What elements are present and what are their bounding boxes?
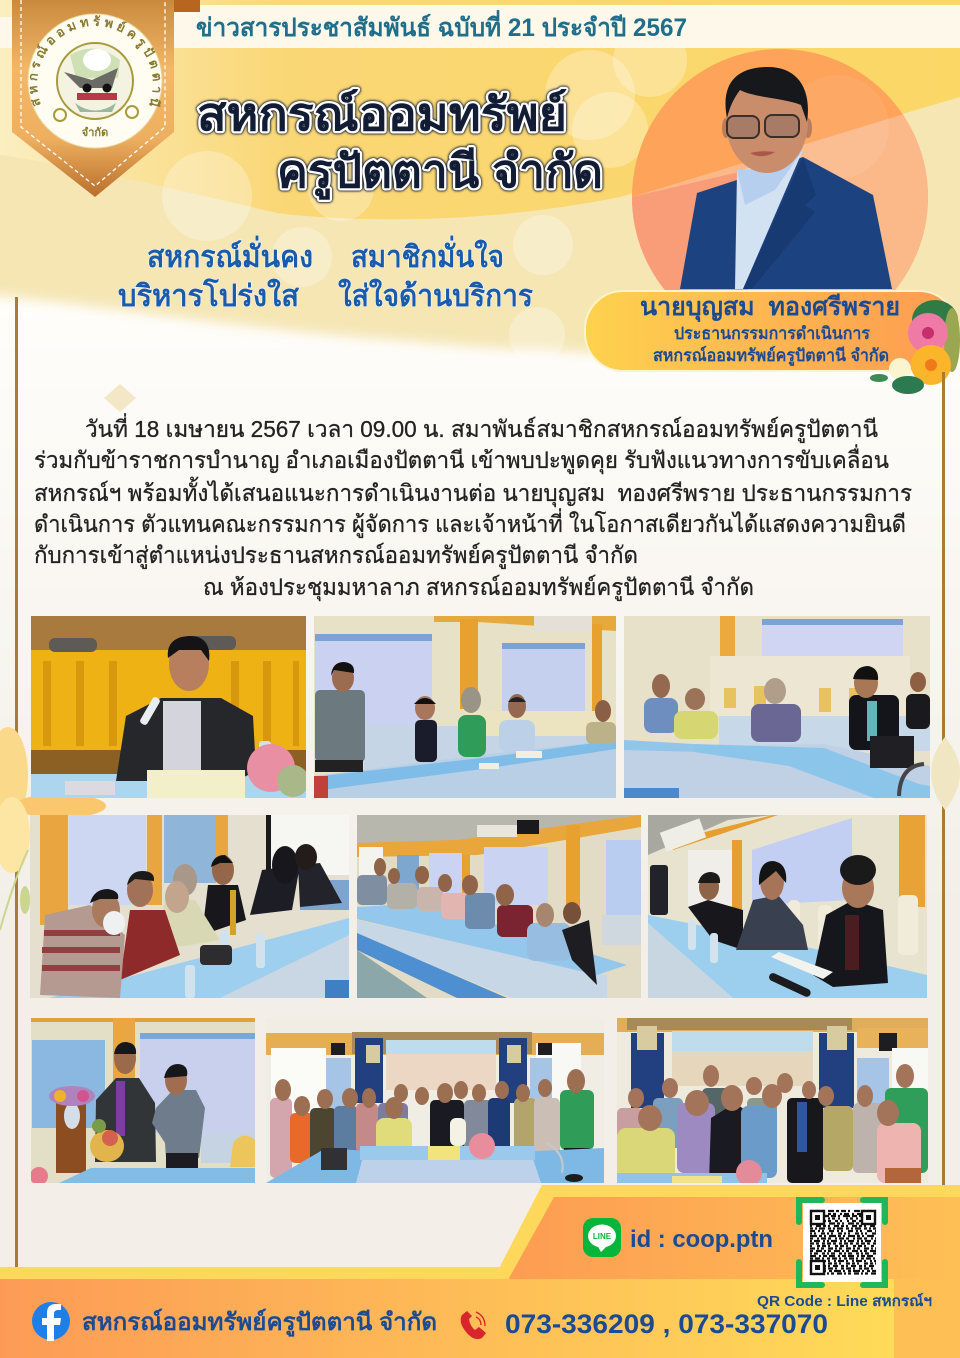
- side rules: [15, 297, 945, 1267]
- header band: [0, 5, 960, 48]
- icon: LINE: [583, 1218, 621, 1257]
- photo 5: long table view: [357, 815, 641, 998]
- photo 7: speakers at podium: [31, 1018, 255, 1183]
- photo 4: attendees side view: [30, 815, 349, 998]
- body text: ณ ห้องประชุมมหาลาภ สหกรณ์ออมทรัพย์ครูปัตตานี จำกัด: [203, 574, 754, 601]
- chairman name: นายบุญสม ทองศรีพราย: [640, 293, 900, 323]
- icon: LINE: LINE: [593, 1232, 612, 1241]
- main title: [197, 88, 603, 200]
- name plate: [585, 291, 957, 371]
- lapel: [743, 157, 816, 289]
- icon: facebook: [32, 1302, 70, 1341]
- line id: id : coop.ptn: [630, 1226, 773, 1253]
- body text: วันที่ 18 เมษายน 2567 เวลา 09.00 น. สมาพันธ์สมาชิกสหกรณ์ออมทรัพย์ครูปัตตานี: [85, 413, 878, 443]
- ribbon with logo: [12, 0, 200, 197]
- photo 9: group photo close: [617, 1018, 928, 1183]
- body text: ร่วมกับข้าราชการบำนาญ อำเภอเมืองปัตตานี เข้าพบปะพูดคุย รับฟังแนวทางการขับเคลื่อน: [34, 444, 889, 474]
- body text: กับการเข้าสู่ตำแหน่งประธานสหกรณ์ออมทรัพย์ครูปัตตานี จำกัด: [34, 542, 638, 569]
- jacket: [680, 157, 892, 289]
- photo 3: seated attendees: [624, 616, 930, 798]
- main title: ครูปัตตานี จำกัด: [277, 145, 603, 200]
- slogan: ใส่ใจด้านบริการ: [338, 278, 533, 313]
- ornament top: [104, 384, 136, 412]
- flowers on name plate: [870, 300, 960, 394]
- portrait disc: [632, 49, 928, 290]
- photo 2: member speaking: [314, 616, 616, 798]
- slogan: สหกรณ์มั่นคง: [147, 235, 313, 274]
- photo 6: three attendees close: [648, 815, 927, 998]
- cooperative logo: จำกัด: [82, 126, 108, 139]
- facebook page name: สหกรณ์ออมทรัพย์ครูปัตตานี จำกัด: [82, 1308, 437, 1337]
- photo 8: group photo: [266, 1032, 604, 1183]
- newsletter heading: ข่าวสารประชาสัมพันธ์ ฉบับที่ 21 ประจำปี 2567: [196, 10, 687, 42]
- photo 1: chairman at desk: [31, 616, 306, 798]
- footer bar: [0, 1279, 960, 1358]
- body text: [34, 413, 912, 601]
- decorative translucent orbs: [162, 23, 687, 363]
- cooperative name: สหกรณ์ออมทรัพย์ครูปัตตานี จำกัด: [653, 345, 889, 367]
- QR caption: QR Code : Line สหกรณ์ฯ: [757, 1292, 932, 1310]
- flower decoration left: [0, 727, 106, 930]
- QR code: [799, 1200, 885, 1285]
- main title: สหกรณ์ออมทรัพย์: [197, 88, 567, 140]
- face: [722, 118, 730, 138]
- phone numbers: 073-336209 , 073-337070: [505, 1309, 828, 1339]
- ornament right: [931, 737, 960, 810]
- portrait of the chairman: [632, 49, 928, 290]
- slogan: [118, 235, 533, 313]
- body text: สหกรณ์ฯ พร้อมทั้งได้เสนอแนะการดำเนินงานต่อ นายบุญสม ทองศรีพราย ประธานกรรมการ: [34, 477, 912, 507]
- cooperative logo: [28, 14, 162, 148]
- icon: phone: [461, 1311, 486, 1339]
- chairman role: ประธานกรรมการดำเนินการ: [674, 324, 871, 343]
- shirt: [735, 150, 803, 289]
- body text: ดำเนินการ ตัวแทนคณะกรรมการ ผู้จัดการ และเจ้าหน้าที่ ในโอกาสเดียวกันได้แสดงความยินดี: [34, 508, 906, 538]
- cooperative logo: สหกรณ์ออมทรัพย์ครูปัตตานี: [30, 15, 161, 108]
- bottom right panel: [0, 1185, 960, 1280]
- slogan: สมาชิกมั่นใจ: [351, 235, 504, 274]
- slogan: บริหารโปร่งใส: [118, 277, 300, 313]
